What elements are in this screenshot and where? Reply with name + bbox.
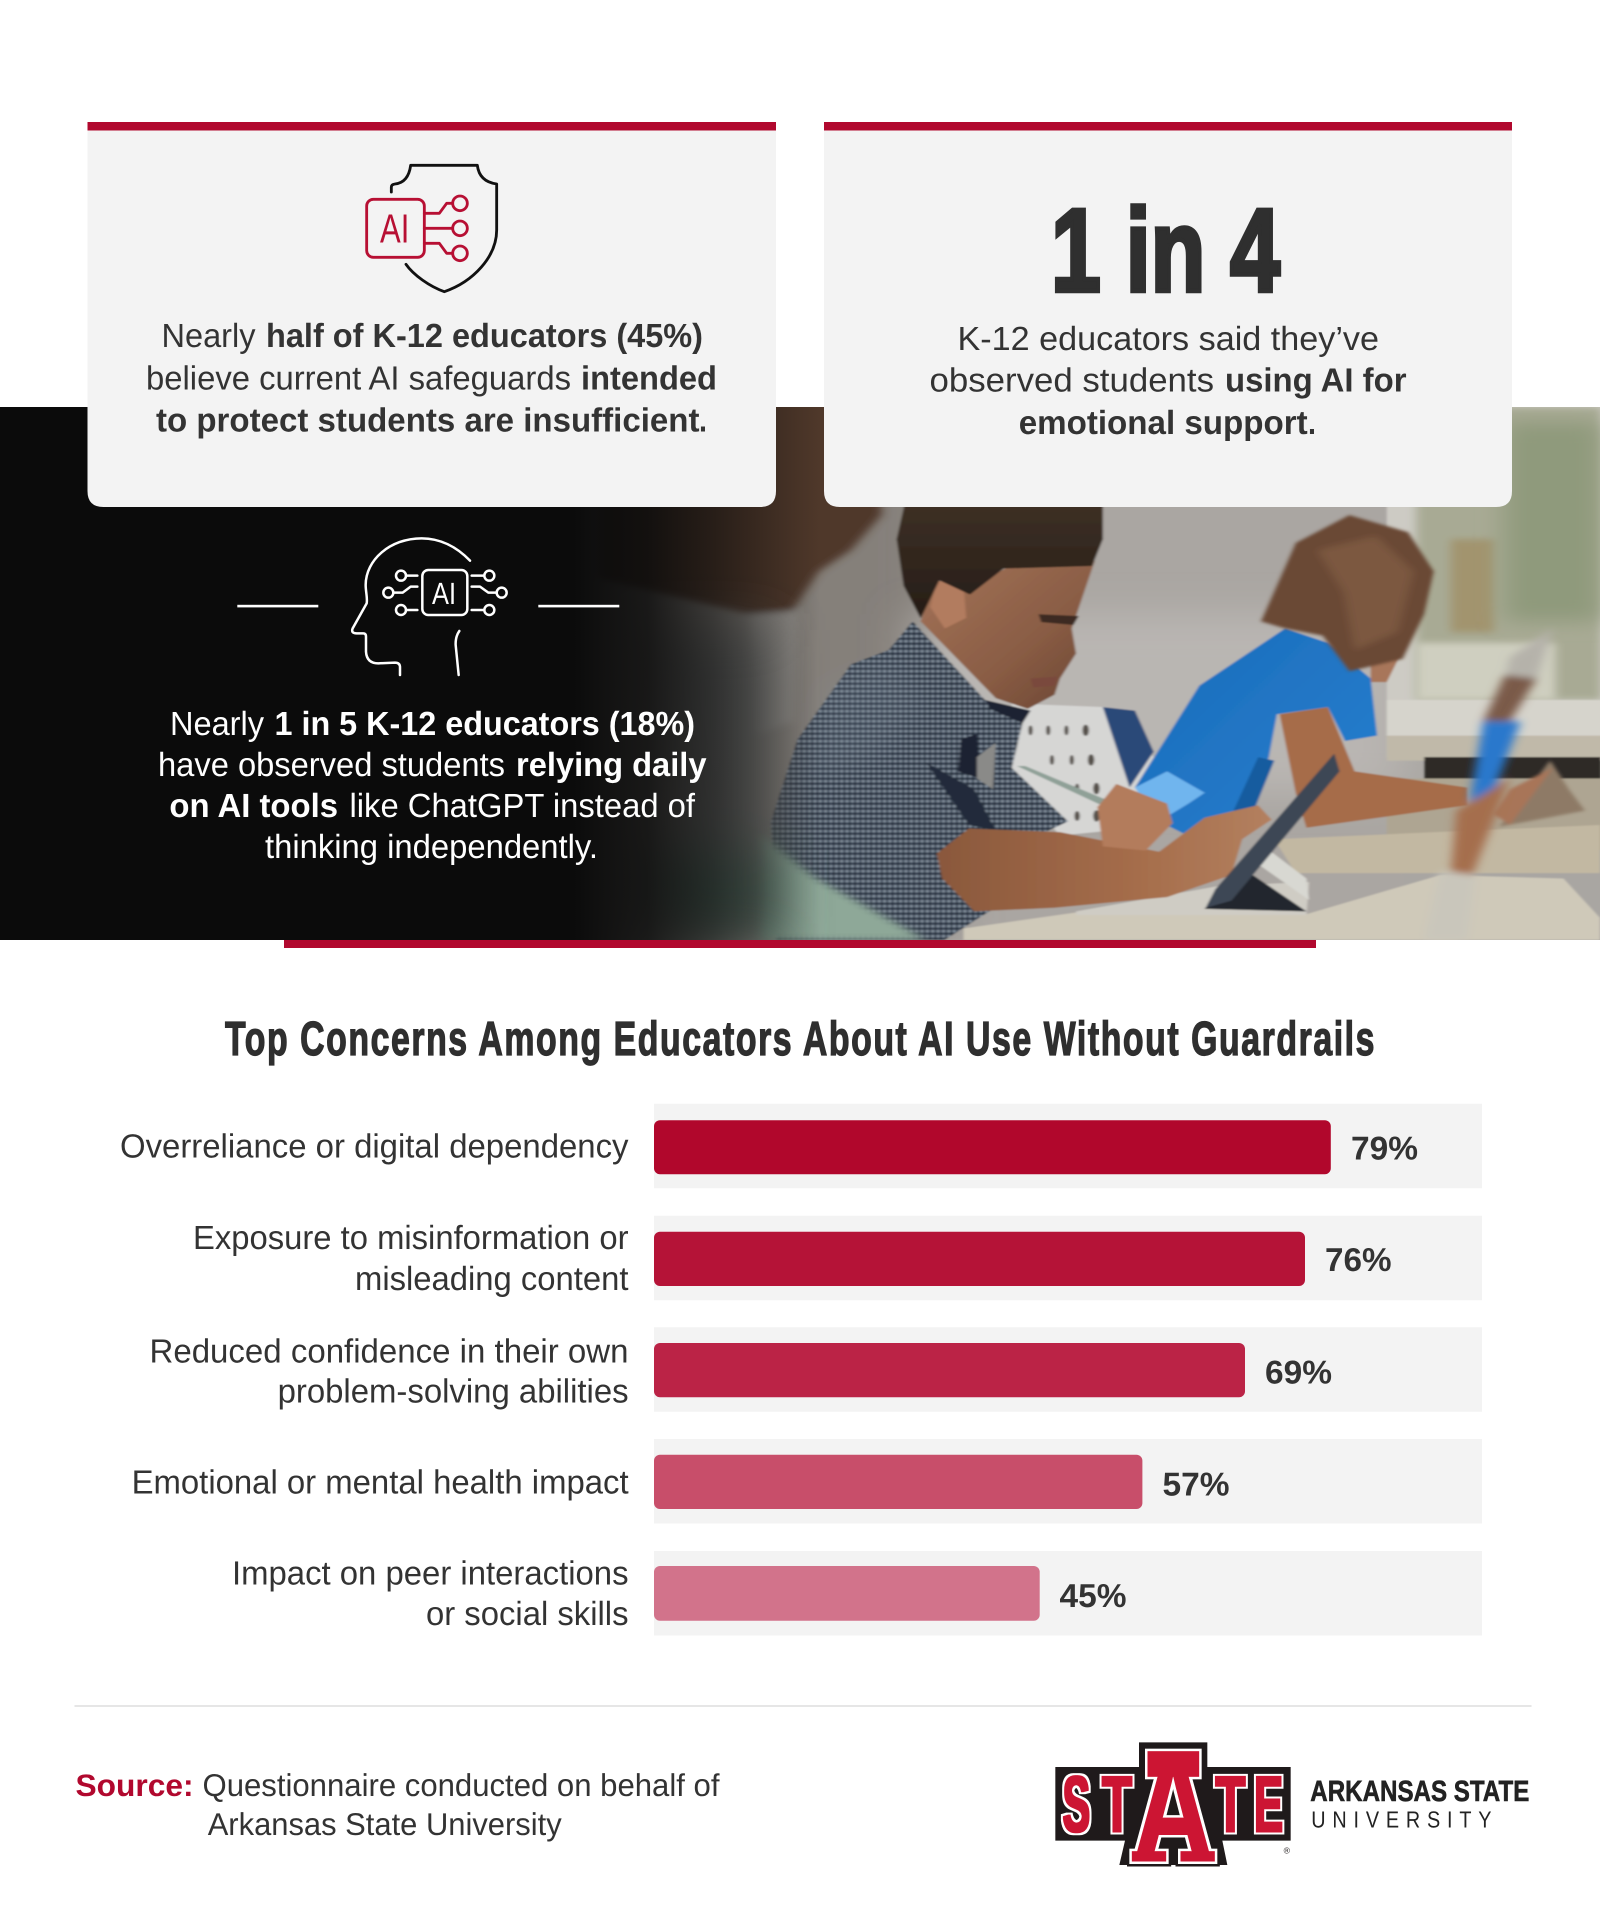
row: peer interactions 45%: Impact on peer interactions [232,1555,628,1592]
text: daily reliance statement: 1 in 5 K-12 educators (18%) [274,706,695,743]
icon: AI shield: AI [380,206,409,251]
wall shading [945,507,1372,939]
row: misinformation 76%: Exposure to misinformation or [193,1220,628,1257]
footer divider [74,1705,1532,1707]
row: misinformation 76%: 76% [1325,1241,1392,1278]
text: daily reliance statement: have observed students [158,747,505,784]
row: overreliance 79%: 79% [1351,1130,1418,1167]
panel: daily reliance stat on photo [158,538,707,866]
text: emotional support statement: using AI for [1225,363,1406,400]
logo mark: STATE: T [1102,1760,1132,1849]
icon: right rule [538,605,619,607]
source note: Arkansas State University [208,1806,562,1842]
text: daily reliance statement: like ChatGPT instead of [350,788,696,825]
row: emotional health 57%: 57% [1162,1465,1230,1502]
text: safeguards statement: half of K-12 educators (45%) [266,318,703,355]
text: safeguards statement: intended [581,360,717,398]
icon: left rule [237,605,318,607]
row: peer interactions 45%: 45% [1060,1577,1126,1614]
row: peer interactions 45% [232,1551,1482,1636]
chair [1012,704,1167,836]
text: emotional support statement: K-12 educators said they’ve [958,321,1379,358]
blurred subject left of boy [640,630,780,940]
text: emotional support statement: emotional support [1019,405,1308,442]
card top accent bar [88,122,776,130]
near desk [964,875,1600,940]
row: confidence 69%: 69% [1265,1354,1332,1391]
big number: 1 in 4: 1 in 4 [1051,185,1280,317]
text: daily reliance statement: on AI tools [169,788,338,825]
logo mark: STATE: ® [1284,1845,1290,1855]
text: safeguards statement: Nearly [162,318,256,355]
paper under tablet [1076,882,1309,915]
panel: emotional support stat [824,122,1512,507]
source note [76,1767,720,1842]
icon: AI head: AI [432,577,456,611]
row: misinformation 76% [193,1216,1482,1300]
text: emotional support statement: observed students [930,363,1214,400]
row: confidence 69%: problem-solving abilities [278,1374,629,1411]
logo mark: STATE: A [1132,1725,1214,1893]
card top accent bar [824,122,1512,130]
boy: shirt [771,621,1068,940]
boy: head [897,504,1103,709]
text: emotional support statement: . [1308,405,1316,442]
blurred foreground head [632,407,888,720]
girl: hair, shirt, arm [1135,515,1467,859]
logo mark: STATE: E [1254,1760,1283,1849]
tablet [1205,754,1340,911]
logo: Arkansas State University [1055,1725,1529,1893]
card background [824,122,1512,507]
far desk [1274,825,1600,873]
bar chart: top concerns [120,1104,1482,1636]
blurred foreground shoulder [760,834,926,940]
window area [1387,400,1600,850]
boy: hand with pen [1017,766,1172,851]
row: peer interactions 45%: or social skills [426,1596,628,1633]
row: emotional health 57% [132,1439,1482,1524]
text: safeguards statement: believe current AI safeguards [146,360,571,398]
text: safeguards statement: . [699,402,707,440]
panel: safeguards stat [88,122,776,507]
row: confidence 69% [150,1327,1482,1412]
logo mark: STATE: S [1063,1760,1090,1849]
icon: AI head [352,538,507,675]
logo mark: STATE: T [1215,1760,1245,1849]
text: daily reliance statement: relying daily [516,747,707,784]
row: emotional health 57%: Emotional or mental health impact [132,1464,629,1501]
row: overreliance 79%: Overreliance or digital dependency [120,1128,629,1165]
logo wordmark: ARKANSAS STATE [1310,1775,1529,1808]
row: misinformation 76%: misleading content [355,1261,629,1298]
photo band: students using tablets [0,400,1600,940]
text: safeguards statement: to protect students are insufficient [156,402,700,440]
text: emotional support statement [930,321,1406,442]
source note: Source: [76,1768,194,1803]
source note: Questionnaire conducted on behalf of [202,1767,720,1803]
text: safeguards statement [146,318,717,440]
row: confidence 69%: Reduced confidence in their own [150,1333,628,1370]
dark fade overlay at left [0,407,820,940]
laptop at far right [1494,761,1585,827]
text: daily reliance statement: Nearly [170,706,264,743]
row: overreliance 79% [120,1104,1482,1188]
text: daily reliance statement: thinking independently. [265,829,598,866]
accent bar under photo [284,940,1316,948]
card background [88,122,776,507]
text: daily reliance statement [158,706,707,866]
logo mark: STATE [1055,1725,1291,1893]
icon: AI shield [367,165,497,292]
logo: Arkansas State University: UNIVERSITY [1311,1807,1498,1833]
boy: arm and hand on tablet [937,805,1272,911]
blurred foreground laptop [1438,632,1552,878]
